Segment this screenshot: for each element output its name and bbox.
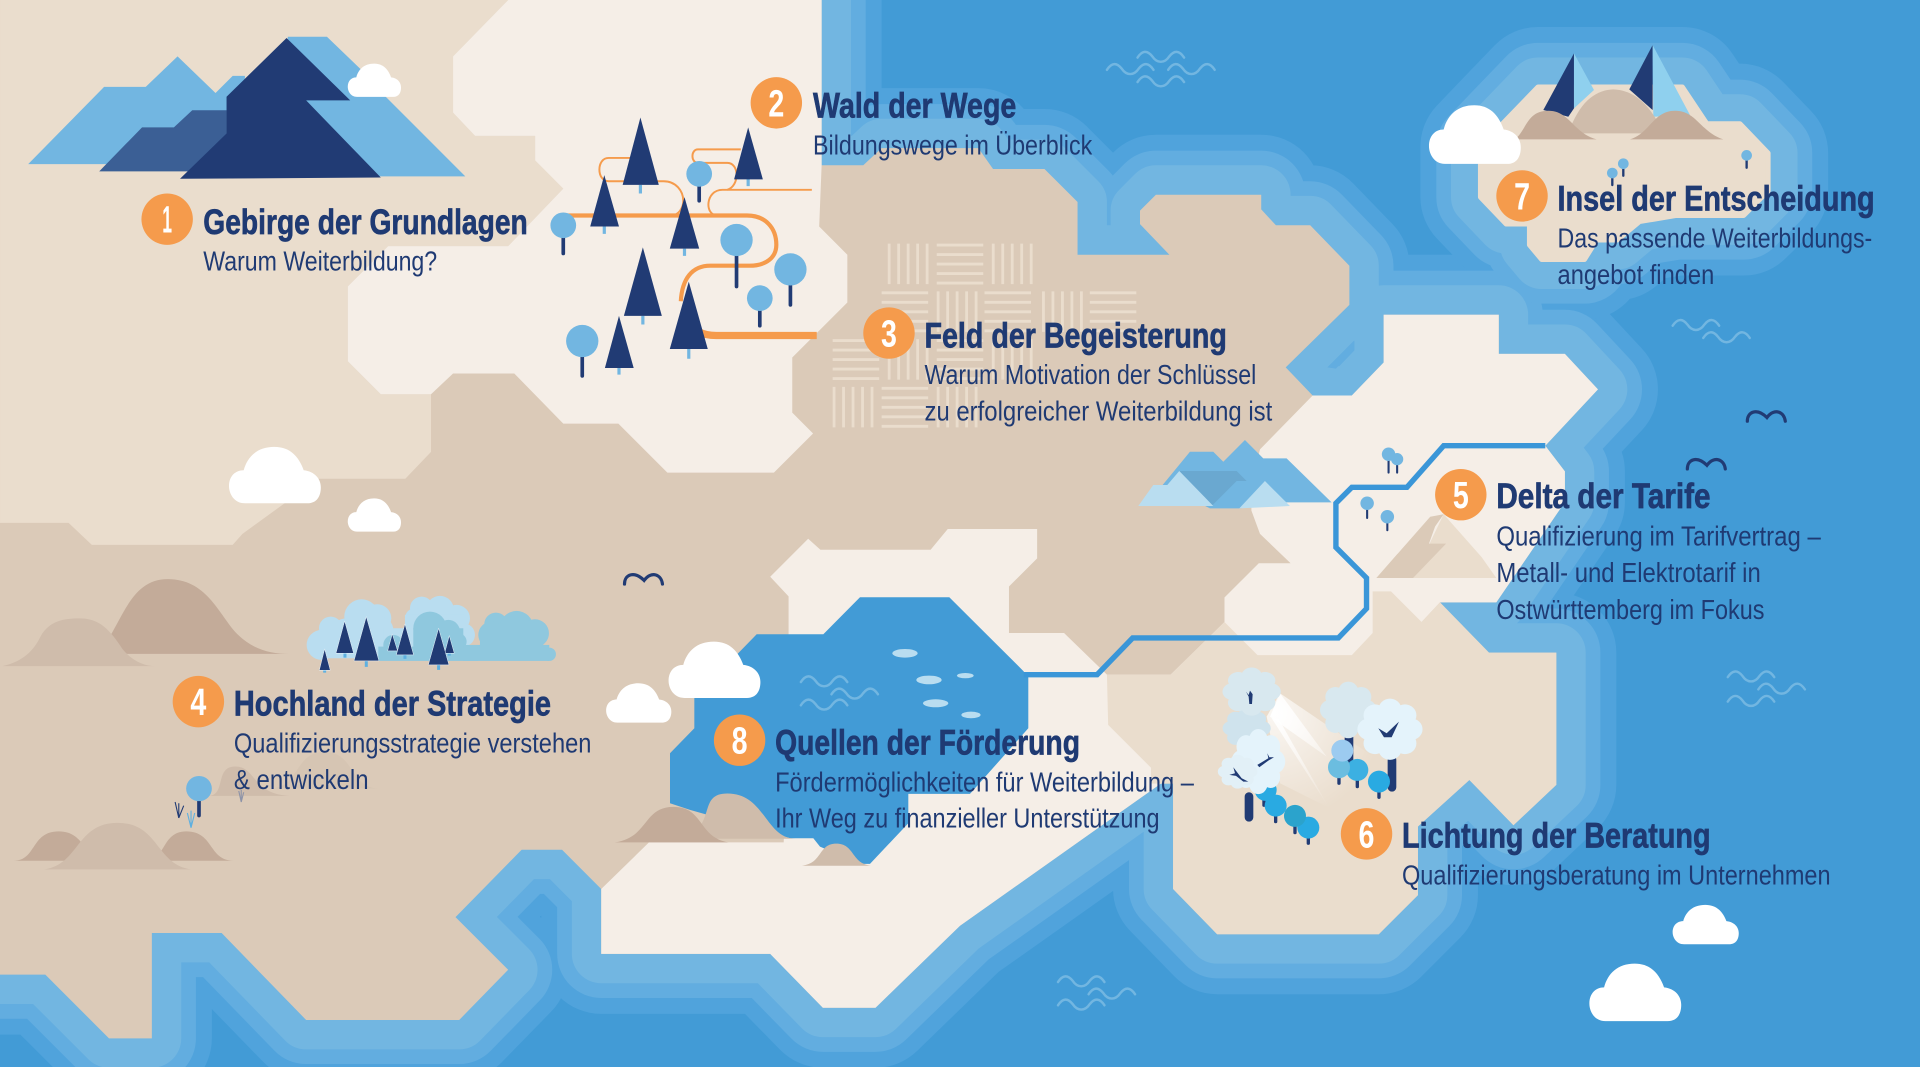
label 8: Quellen der Förderung: Quellen der Förderung (775, 722, 1080, 762)
illustration: strategy forest (307, 596, 556, 673)
illustration: lake of funding (670, 597, 1028, 864)
label 5: Delta der Tarife: Delta der Tarife (1496, 476, 1711, 516)
label 1: Gebirge der Grundlagen (141, 193, 528, 277)
sea waves (1058, 52, 1805, 1010)
birds (624, 412, 1785, 584)
label 4: Hochland der Strategie: & entwickeln (234, 764, 369, 795)
label 5: Delta der Tarife: Metall- und Elektrotarif in (1496, 557, 1761, 588)
label 2: Wald der Wege: Wald der Wege (813, 86, 1016, 126)
label 4: Hochland der Strategie: 4 (190, 682, 206, 724)
label 2: Wald der Wege: Bildungswege im Überblick (813, 129, 1093, 160)
label 3: Feld der Begeisterung: Warum Motivation der Schlüssel (924, 359, 1256, 390)
label 5: Delta der Tarife: Ostwürttemberg im Fokus (1496, 594, 1764, 625)
label 2: Wald der Wege (751, 77, 1093, 160)
illustration: river (1024, 446, 1545, 675)
label 3: Feld der Begeisterung: zu erfolgreicher Weiterbildung ist (924, 396, 1272, 427)
clouds (229, 64, 1739, 1021)
label 3: Feld der Begeisterung: 3 (881, 314, 897, 356)
illustration: field hatching (833, 244, 1113, 428)
label 1: Gebirge der Grundlagen: 1 (162, 200, 172, 242)
island (1480, 87, 1768, 260)
label 1: Gebirge der Grundlagen: Warum Weiterbildung? (203, 246, 437, 277)
label 6: Lichtung der Beratung (1341, 808, 1831, 891)
label 4: Hochland der Strategie (173, 676, 591, 795)
label 8: Quellen der Förderung: Ihr Weg zu finanzieller Unterstützung (775, 803, 1160, 834)
illustration: clearing trees with sun rays (1218, 668, 1423, 843)
label 8: Quellen der Förderung: Fördermöglichkeiten für Weiterbildung – (775, 767, 1194, 798)
label 6: Lichtung der Beratung: Lichtung der Beratung (1402, 815, 1711, 855)
illustration: delta pyramid and trees (1360, 448, 1496, 578)
illustration: orange forest paths (563, 149, 817, 336)
label 8: Quellen der Förderung (714, 714, 1194, 834)
label 6: Lichtung der Beratung: 6 (1359, 814, 1374, 856)
illustration: highland tree and grass (175, 776, 244, 828)
label 4: Hochland der Strategie: Hochland der Strategie (234, 684, 551, 724)
label 5: Delta der Tarife: 5 (1453, 475, 1469, 517)
land: lightest forest area (348, 0, 847, 473)
illustration: island mountains (1515, 45, 1752, 185)
label 7: Insel der Entscheidung: angebot finden (1558, 259, 1714, 290)
illustration: forest trees (550, 118, 807, 376)
label 3: Feld der Begeisterung (863, 307, 1272, 427)
label 2: Wald der Wege: 2 (768, 83, 784, 125)
label 1: Gebirge der Grundlagen: Gebirge der Grundlagen (203, 202, 528, 242)
water patch in bay (1327, 340, 1354, 369)
land: light tan clearing (1107, 591, 1556, 934)
illustration: highland hills (2, 579, 380, 869)
land: lightest delta and southern plain (601, 315, 1598, 1008)
label 8: Quellen der Förderung: 8 (732, 721, 748, 763)
label 7: Insel der Entscheidung: 7 (1514, 176, 1530, 218)
land: light tan north-west (0, 0, 563, 545)
illustration: mountains of foundations (28, 37, 465, 179)
label 6: Lichtung der Beratung: Qualifizierungsberatung im Unternehmen (1402, 860, 1831, 891)
label 4: Hochland der Strategie: Qualifizierungsstrategie verstehen (234, 727, 591, 758)
illustration: delta mountains (1138, 440, 1332, 508)
label 5: Delta der Tarife (1435, 469, 1821, 625)
label 5: Delta der Tarife: Qualifizierung im Tarifvertrag – (1496, 520, 1821, 551)
label 3: Feld der Begeisterung: Feld der Begeisterung (924, 316, 1227, 356)
illustration: hills at lake (615, 793, 871, 866)
label 7: Insel der Entscheidung (1496, 170, 1875, 290)
